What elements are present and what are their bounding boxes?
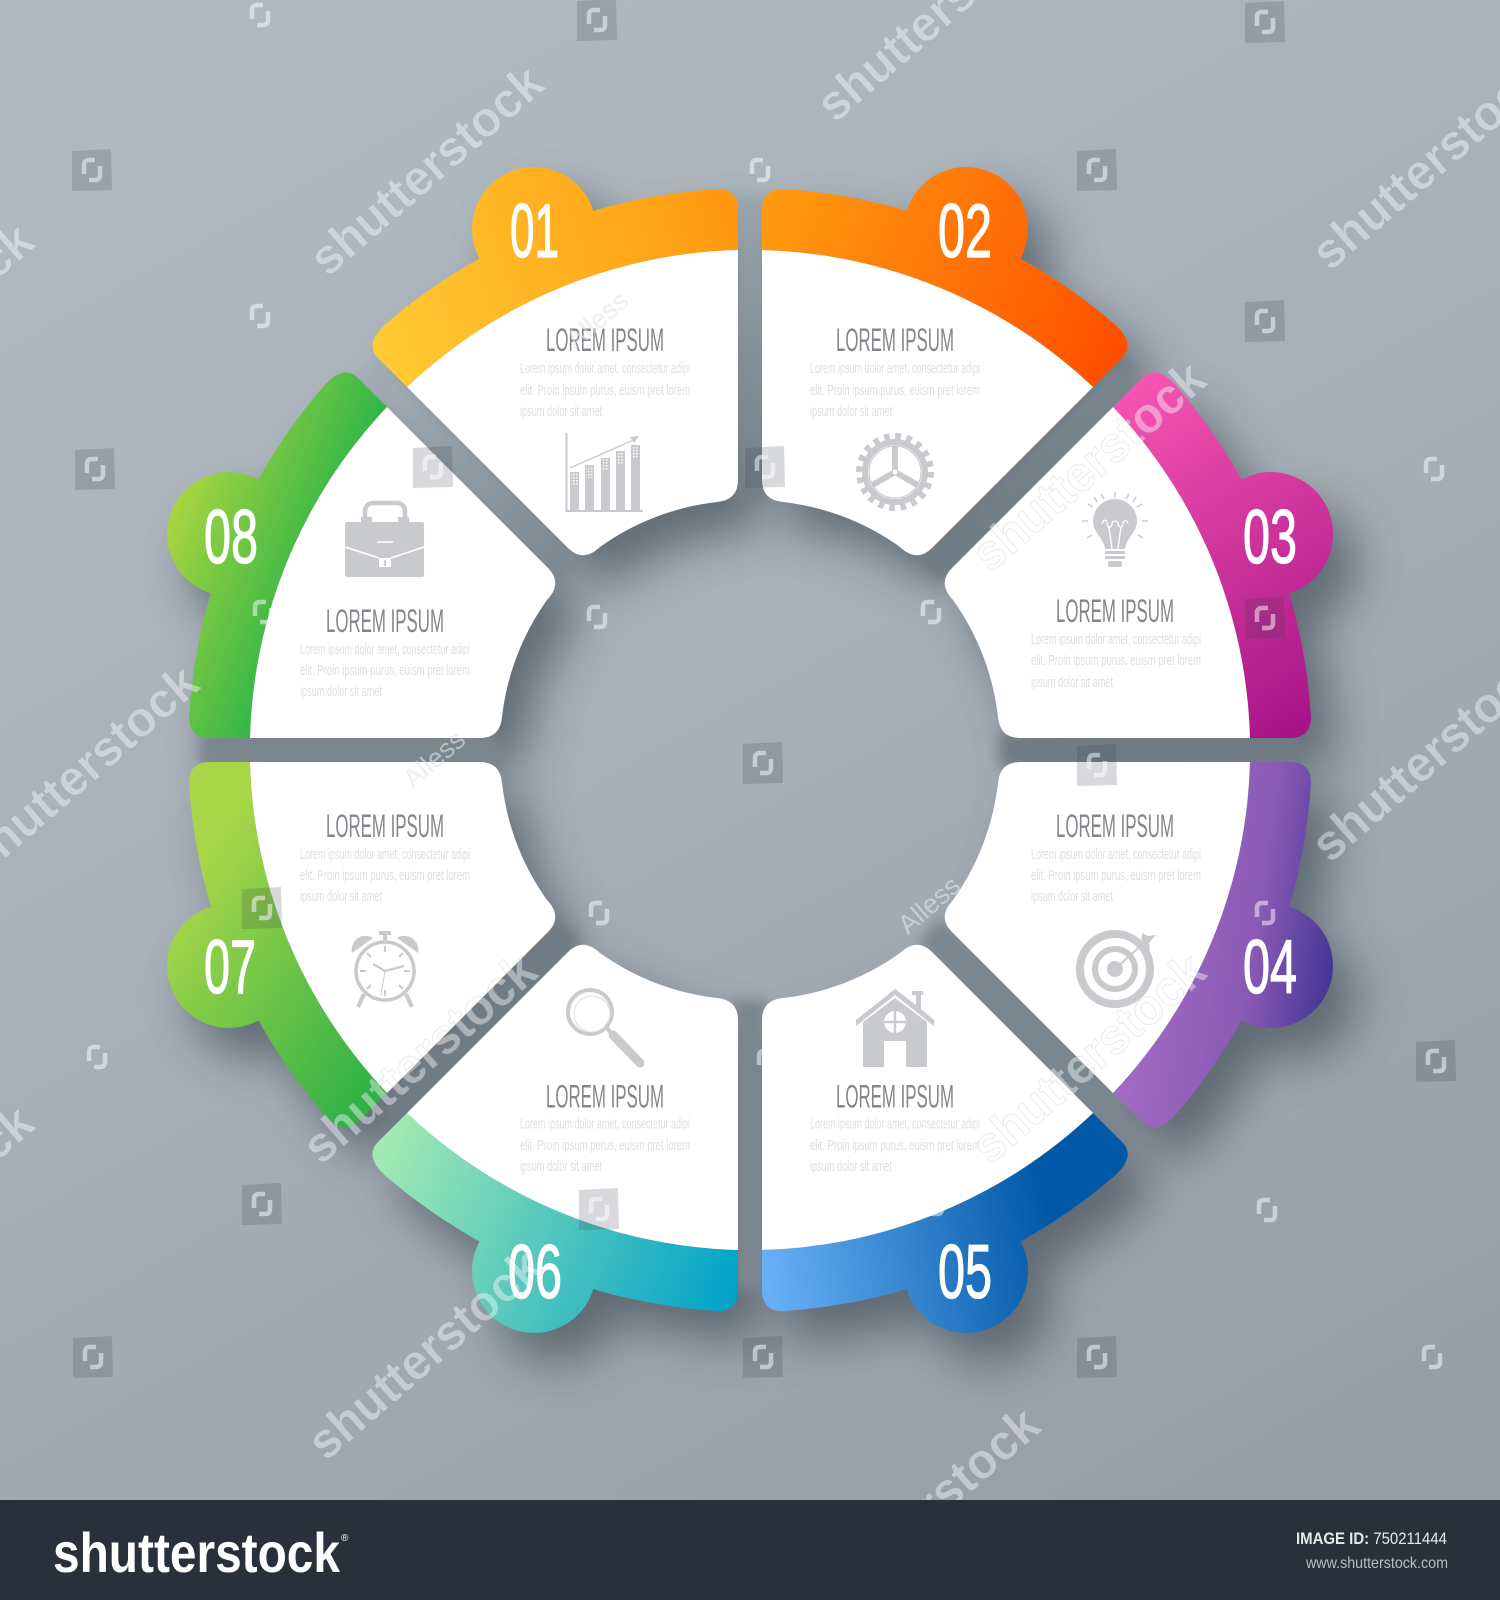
icon: light bulb	[1082, 492, 1148, 567]
body text 03: Lorem ipsum dolor amet, consectetur adipi	[1031, 631, 1201, 648]
body text 06: elit. Proin ipsum purus, euism pret lorem	[520, 1137, 690, 1154]
panel 08	[167, 372, 555, 738]
body text 05	[810, 1116, 980, 1175]
white card 05	[762, 945, 1093, 1250]
heading 07: LOREM IPSUM	[326, 808, 444, 844]
body text 06: ipsum dolor sit amet	[520, 1158, 603, 1175]
panel 06	[372, 945, 738, 1333]
watermarks: shutterstock	[296, 1238, 552, 1470]
colored band 01	[372, 167, 738, 387]
colored band 06	[372, 1113, 738, 1333]
white card 04	[945, 762, 1250, 1093]
body text 08: Lorem ipsum dolor amet, consectetur adipi	[300, 641, 470, 658]
panel 04	[945, 762, 1333, 1128]
body text 04	[1031, 846, 1201, 905]
number 04: 04	[1243, 925, 1297, 1010]
heading 05: LOREM IPSUM	[836, 1078, 954, 1114]
body text 04: Lorem ipsum dolor amet, consectetur adipi	[1031, 846, 1201, 863]
watermarks: shutterstock	[960, 350, 1216, 582]
body text 01: elit. Proin ipsum purus, euism pret lorem	[520, 382, 690, 399]
colored band 04	[1113, 762, 1333, 1128]
body text 06: Lorem ipsum dolor amet, consectetur adipi	[520, 1116, 690, 1132]
white card 06	[407, 945, 738, 1250]
icon: magnifier	[567, 990, 640, 1063]
heading 04: LOREM IPSUM	[1056, 808, 1174, 844]
panel 01	[372, 167, 738, 555]
heading 01: LOREM IPSUM	[546, 322, 664, 358]
body text 07: ipsum dolor sit amet	[300, 888, 383, 905]
body text 08: ipsum dolor sit amet	[300, 683, 383, 700]
body text 05: Lorem ipsum dolor amet, consectetur adipi	[810, 1116, 980, 1132]
footer logo: shutterstock	[53, 1521, 341, 1584]
number 08: 08	[204, 495, 258, 580]
footer bar	[0, 1500, 1500, 1600]
watermarks: Alless	[397, 724, 471, 794]
body text 05: ipsum dolor sit amet	[810, 1158, 893, 1175]
body text 07	[300, 846, 470, 905]
icon: gear	[860, 436, 930, 508]
icon: target	[1080, 933, 1156, 1004]
body text 04: elit. Proin ipsum purus, euism pret lorem	[1031, 867, 1201, 884]
panel 03	[945, 372, 1333, 738]
body text 03	[1031, 631, 1201, 691]
body text 02	[810, 360, 980, 420]
panel 05	[762, 945, 1128, 1333]
body text 02: elit. Proin ipsum purus, euism pret lorem	[810, 382, 980, 399]
heading 03: LOREM IPSUM	[1056, 593, 1174, 629]
body text 07: elit. Proin ipsum purus, euism pret lorem	[300, 867, 470, 884]
watermarks: shutterstock	[291, 942, 547, 1174]
body text 02: Lorem ipsum dolor amet, consectetur adipi	[810, 360, 980, 377]
heading 08: LOREM IPSUM	[326, 603, 444, 639]
number 02: 02	[938, 189, 992, 274]
number 03: 03	[1243, 495, 1297, 580]
white card 02	[762, 250, 1093, 555]
number 07: 07	[204, 925, 256, 1010]
white card 08	[250, 407, 555, 738]
watermarks: Alless	[560, 285, 634, 355]
website: www.shutterstock.com	[1305, 1555, 1448, 1572]
watermarks: shutterstock	[960, 942, 1216, 1174]
body text 08: elit. Proin ipsum purus, euism pret lorem	[300, 662, 470, 679]
body text 01: Lorem ipsum dolor amet, consectetur adipi	[520, 360, 690, 377]
panel 02	[762, 167, 1128, 555]
colored band 05	[762, 1113, 1128, 1333]
icon: alarm clock	[352, 933, 418, 1007]
watermarks: shutterstock	[298, 54, 554, 286]
soft panel shadows	[191, 197, 1357, 1363]
body text 04: ipsum dolor sit amet	[1031, 888, 1114, 905]
number 01: 01	[510, 189, 559, 274]
number 06: 06	[508, 1230, 562, 1315]
body text 08	[300, 641, 470, 700]
heading 02: LOREM IPSUM	[836, 322, 954, 358]
heading 06: LOREM IPSUM	[546, 1078, 664, 1114]
panel 07	[167, 762, 555, 1128]
watermarks: Alless	[892, 870, 966, 940]
body text 06	[520, 1116, 690, 1175]
colored band 07	[167, 762, 387, 1128]
number 05: 05	[938, 1230, 992, 1315]
image id: IMAGE ID: 750211444	[1296, 1529, 1447, 1548]
white card 03	[945, 407, 1250, 738]
colored band 02	[762, 167, 1128, 387]
body text 05: elit. Proin ipsum purus, euism pret lorem	[810, 1137, 980, 1154]
body text 07: Lorem ipsum dolor amet, consectetur adipi	[300, 846, 470, 863]
body text 03: elit. Proin ipsum purus, euism pret lorem	[1031, 652, 1201, 669]
body text 01	[520, 360, 690, 420]
white card 07	[250, 762, 555, 1093]
body text 01: ipsum dolor sit amet	[520, 403, 603, 420]
body text 03: ipsum dolor sit amet	[1031, 674, 1114, 691]
body text 02: ipsum dolor sit amet	[810, 403, 893, 420]
icon: briefcase	[345, 503, 424, 577]
icon: house	[856, 989, 934, 1067]
registered mark: ®	[341, 1533, 349, 1544]
icon: bar chart	[566, 433, 643, 512]
colored band 08	[167, 372, 387, 738]
white card 01	[407, 250, 738, 555]
colored band 03	[1113, 372, 1333, 738]
